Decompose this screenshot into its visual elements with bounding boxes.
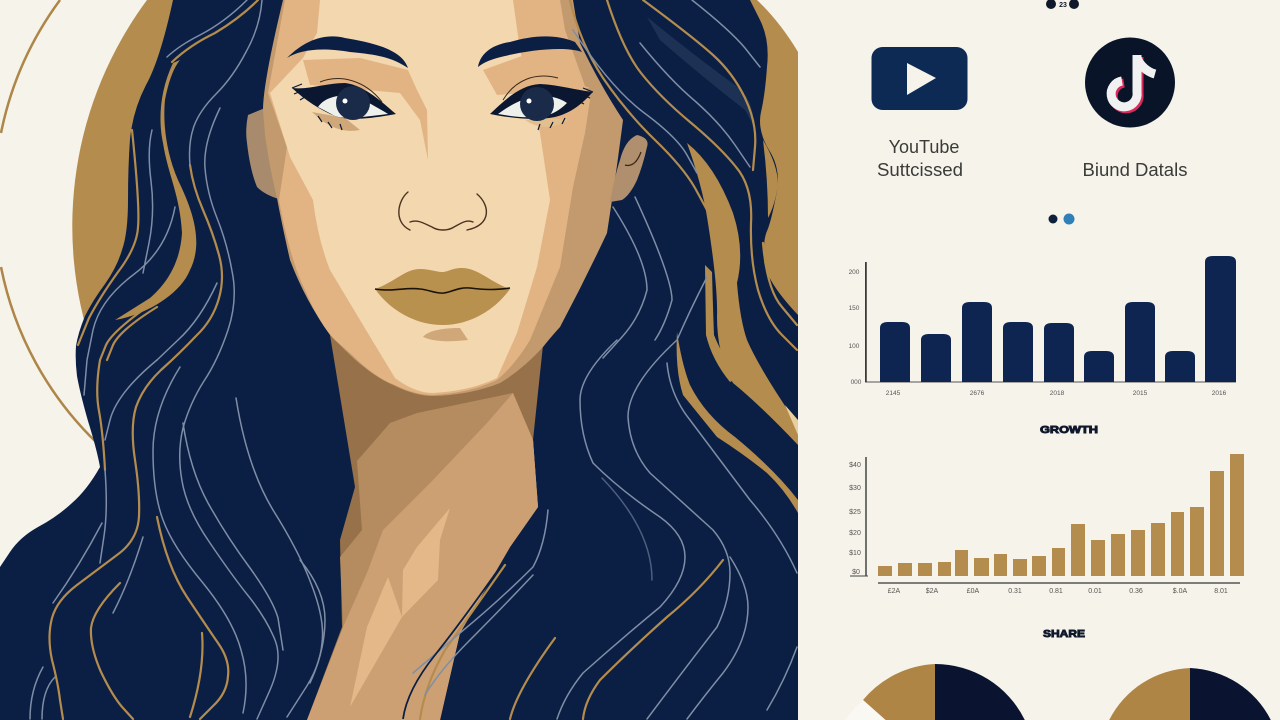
navy bar chart: 2676 [970, 390, 985, 397]
face [263, 0, 623, 396]
lighter hair sheen [647, 17, 753, 125]
navy bar chart: 000 [851, 379, 862, 386]
YouTube label: Suttcissed [877, 160, 963, 180]
section heading: bar chart [1048, 214, 1074, 224]
gold bar chart: $20 [849, 530, 861, 537]
TikTok label: Biund Datals [1083, 159, 1187, 180]
top heading [1046, 0, 1079, 9]
portrait illustration [0, 0, 798, 720]
dark strand along neck edge [403, 553, 510, 719]
gold sun disc [72, 0, 798, 350]
left eye [292, 79, 396, 130]
left ear [246, 108, 279, 199]
fine blue hair strands [30, 0, 797, 719]
gold bar chart: $25 [849, 509, 861, 516]
gold bar chart [849, 454, 1244, 595]
gold bar chart: £2A [888, 588, 901, 595]
gold bar chart: 0.01 [1088, 588, 1102, 595]
hair mass [0, 0, 798, 720]
top heading: 23 [1059, 2, 1067, 9]
gold bar chart: 0.36 [1129, 588, 1143, 595]
lips [375, 268, 510, 341]
YouTube label [877, 137, 963, 180]
section heading: gold chart: GROWTH [1040, 425, 1098, 436]
navy bar chart [849, 256, 1236, 397]
navy bar chart: 2016 [1212, 390, 1227, 397]
right ear [610, 135, 648, 202]
gold bar chart: £0A [967, 588, 980, 595]
gold bar chart: $2A [926, 588, 939, 595]
neck [307, 335, 543, 720]
navy bar chart: 200 [849, 269, 860, 276]
gold bar chart: 8.01 [1214, 588, 1228, 595]
right eyebrow [478, 36, 582, 67]
gold bar chart: $10 [849, 550, 861, 557]
gold bar chart: $.0A [1173, 588, 1188, 595]
gold bar chart: $30 [849, 485, 861, 492]
navy bar chart: 2145 [886, 390, 901, 397]
gold hair locks [115, 60, 798, 513]
right pie chart [1109, 668, 1271, 720]
icon: YouTube play button [872, 47, 968, 110]
gold bar chart: $0 [852, 569, 860, 576]
navy bar chart: 100 [849, 343, 860, 350]
right eye [490, 76, 593, 130]
navy bar chart: 2018 [1050, 390, 1065, 397]
navy bar chart: 150 [849, 305, 860, 312]
icon: TikTok note [1085, 38, 1175, 128]
left eyebrow [287, 36, 408, 68]
nose [399, 192, 486, 230]
gold bar chart: 0.81 [1049, 588, 1063, 595]
right data panel [845, 0, 1271, 720]
section heading: pies: SHARE [1043, 628, 1085, 640]
gold hair strands [50, 0, 797, 719]
gold bar chart: 0.31 [1008, 588, 1022, 595]
gold bar chart: $40 [849, 462, 861, 469]
navy bar chart: 2015 [1133, 390, 1148, 397]
YouTube label: YouTube [889, 137, 959, 157]
left pie chart [845, 664, 1025, 720]
thin gold ring [1, 0, 97, 443]
